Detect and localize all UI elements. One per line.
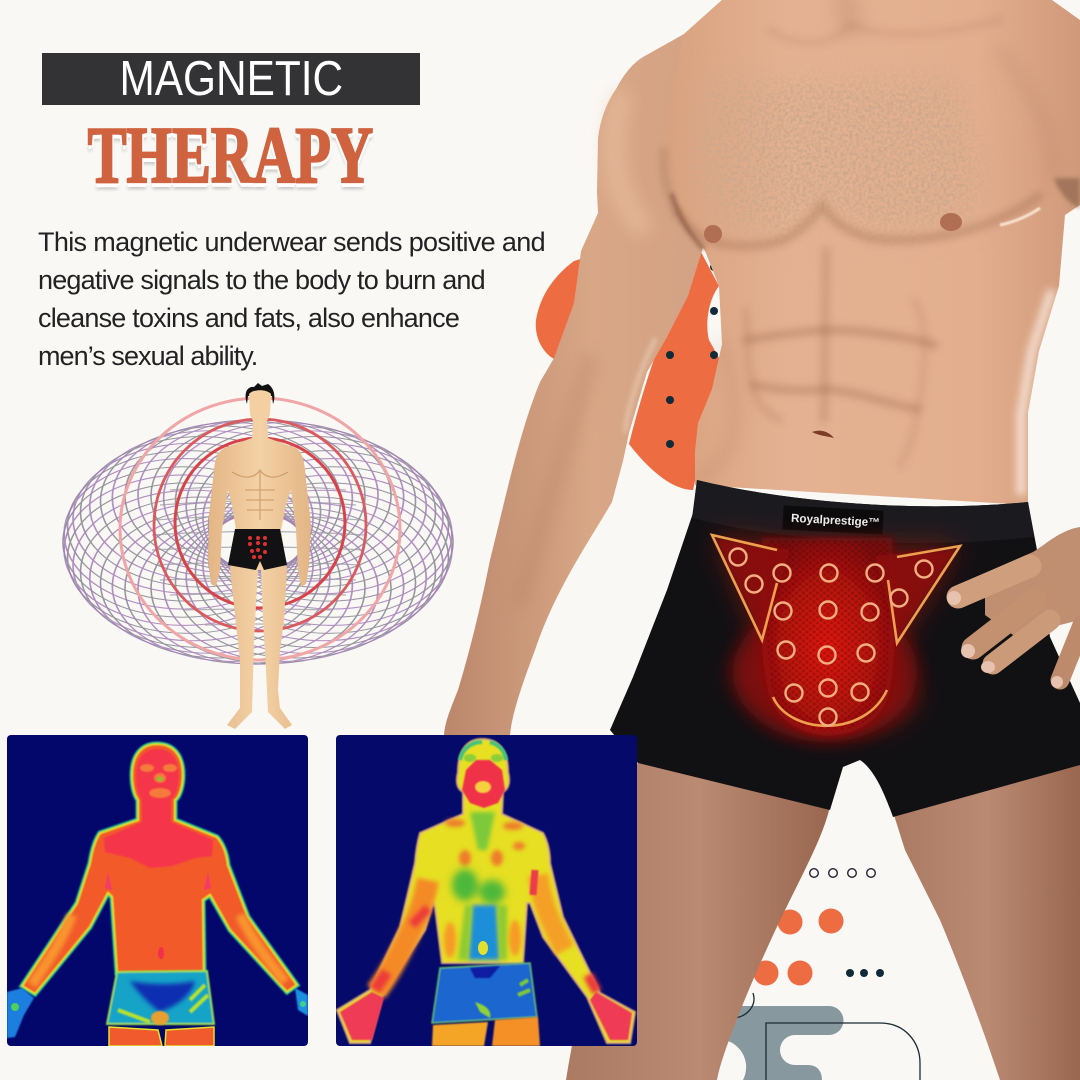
brand label: Royalprestige™ bbox=[791, 512, 880, 529]
chest and abs shading bbox=[664, 0, 1052, 480]
standing man figure bbox=[208, 383, 311, 729]
thighs bbox=[109, 1027, 162, 1046]
central latitude lines bbox=[152, 486, 364, 625]
underwear bbox=[107, 971, 214, 1024]
armpit hair bbox=[1054, 178, 1080, 208]
navel bbox=[158, 947, 164, 959]
decorative shapes lower right bbox=[725, 869, 920, 1080]
waist heat bbox=[444, 920, 521, 958]
chest green bbox=[452, 869, 505, 904]
abdomen cool strip bbox=[468, 905, 500, 960]
magnetic field torus diagram bbox=[29, 383, 487, 729]
arm highlight and shadow bbox=[520, 100, 655, 600]
red concentric rings bbox=[120, 398, 400, 660]
arm heat bbox=[32, 915, 72, 985]
magnet rings bbox=[730, 548, 932, 726]
waistband bbox=[692, 480, 1034, 543]
left arm bbox=[444, 0, 740, 735]
left leg bbox=[566, 760, 830, 1080]
face heat bbox=[462, 760, 505, 808]
description text: men’s sexual ability. bbox=[38, 341, 257, 371]
body base bbox=[337, 739, 635, 1043]
right arm heat bbox=[538, 875, 565, 950]
hand on hip bbox=[947, 527, 1080, 688]
purple wireframe torus bbox=[29, 400, 487, 684]
red head and chest bbox=[104, 749, 213, 868]
hands bbox=[340, 992, 384, 1040]
decorative orange blob behind torso bbox=[536, 250, 719, 490]
face details bbox=[140, 764, 177, 798]
description text: cleanse toxins and fats, also enhance bbox=[38, 303, 459, 333]
description text: negative signals to the body to burn and bbox=[38, 265, 485, 295]
photo: man wearing magnetic underwear bbox=[444, 0, 1080, 1080]
thermal image: after bbox=[7, 735, 308, 1046]
underwear bbox=[432, 963, 537, 1023]
heading: THERAPY: THERAPY bbox=[88, 112, 373, 200]
left arm heat bbox=[376, 880, 428, 992]
heading bar: MAGNETIC: MAGNETIC bbox=[119, 52, 343, 106]
right side light edge bbox=[1021, 290, 1052, 495]
description text: This magnetic underwear sends positive and bbox=[38, 227, 545, 257]
red heat glow bbox=[714, 535, 960, 742]
heading bar: MAGNETIC bbox=[42, 53, 420, 105]
thighs bbox=[432, 1022, 488, 1046]
black underwear bbox=[610, 480, 1080, 817]
thermal image: before bbox=[336, 735, 637, 1046]
chest hair bbox=[690, 80, 985, 240]
hands bbox=[7, 988, 34, 1038]
pec highlight bbox=[1000, 208, 1040, 225]
nipples and navel bbox=[704, 225, 722, 243]
neck bbox=[470, 812, 495, 850]
torso bbox=[667, 0, 1080, 505]
body halo bbox=[22, 744, 297, 994]
gray wireframe torus bbox=[31, 398, 485, 686]
brand label bbox=[782, 505, 884, 535]
right leg bbox=[893, 762, 1080, 1080]
description text bbox=[38, 227, 545, 371]
shoulder heat bbox=[445, 819, 525, 866]
magnet triangles and arc bbox=[712, 535, 960, 726]
body edge bbox=[22, 744, 297, 994]
